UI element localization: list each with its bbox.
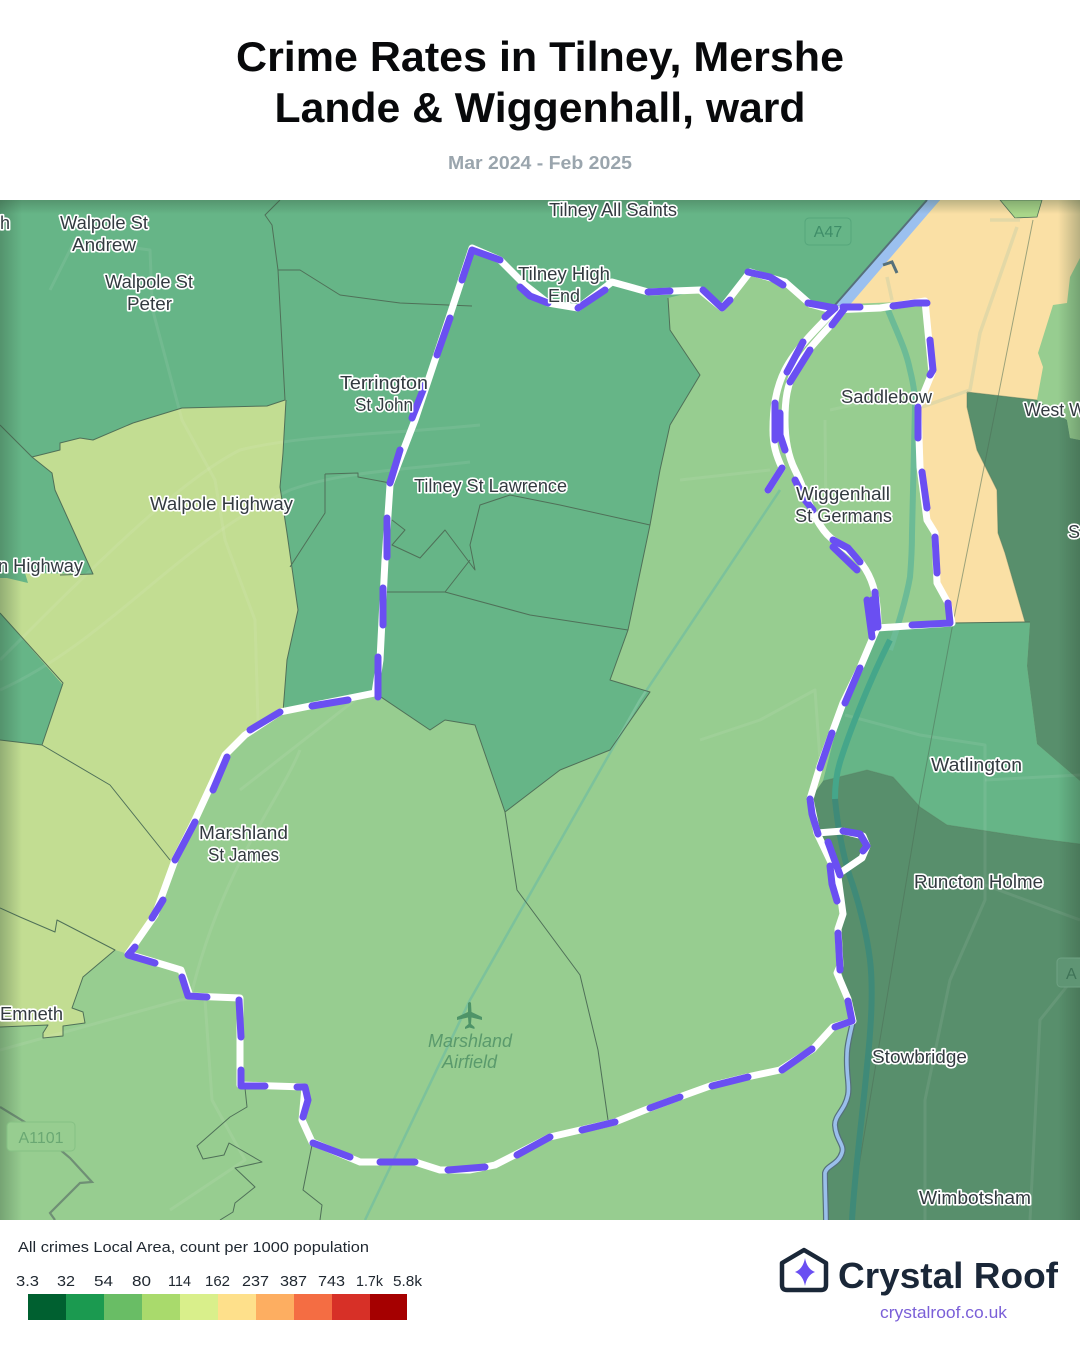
logo url: crystalroof.co.uk (880, 1304, 1008, 1322)
river Ouse lower fill (825, 1021, 853, 1222)
tan zone roads (887, 220, 1020, 407)
subtitle: date range: Mar 2024 - Feb 2025 (448, 153, 632, 173)
legend tick labels: 80 (132, 1273, 151, 1290)
zone: Saddlebow tan (848, 200, 1080, 623)
legend tick labels: 3.3 (16, 1273, 39, 1290)
label: h: h (0, 213, 10, 233)
label: Runcton Holme: Runcton Holme (914, 872, 1043, 892)
legend tick labels: 387 (280, 1273, 307, 1290)
drain channel mid (835, 640, 890, 799)
road network (0, 240, 1080, 1220)
legend tick labels: 237 (242, 1273, 269, 1290)
choropleth map panel (0, 200, 1080, 1222)
label: Watlington: Watlington (931, 755, 1022, 775)
ward boundary purple dashes (128, 250, 950, 1170)
edge vignette (0, 200, 1080, 1220)
road shield: A (1057, 958, 1080, 987)
river Ouse upper (835, 200, 940, 307)
legend (16, 1239, 423, 1320)
road shield: A47: A47 (814, 224, 842, 241)
legend tick labels (16, 1273, 423, 1290)
road shield: A: A (1066, 966, 1077, 983)
label: Wiggenhall St Germans (795, 484, 892, 526)
label: Wiggenhall St Germans: St Germans (795, 506, 892, 526)
label: S cropped: S (1068, 522, 1080, 542)
label: Tilney High End: End (548, 286, 580, 306)
label: Marshland St James: Marshland (199, 823, 288, 843)
road shield: A1101: A1101 (18, 1130, 64, 1147)
icon: airfield plane (457, 1002, 482, 1029)
road shield: A1101 (7, 1122, 75, 1151)
legend tick labels: 162 (205, 1273, 230, 1290)
legend title: All crimes Local Area, count per 1000 population (18, 1239, 369, 1256)
label: Tilney St Lawrence: Tilney St Lawrence (414, 476, 567, 496)
title: Lande & Wiggenhall, ward (274, 84, 806, 131)
place labels (0, 200, 1080, 1208)
label: Walpole St Andrew: Walpole St (60, 213, 148, 233)
label: Tilney All Saints: Tilney All Saints (549, 200, 677, 220)
logo: Crystal Roof (782, 1250, 1059, 1322)
label: Walpole Highway: Walpole Highway (150, 494, 293, 514)
label: Highway cropped: n Highway (0, 556, 83, 576)
road shield: A47 (805, 218, 851, 245)
label: Walpole St Andrew: Andrew (72, 235, 137, 255)
icon: house with star (782, 1250, 826, 1290)
zone: north and Tilney mid green (0, 200, 940, 812)
zone: far west pocket mid green (0, 613, 63, 745)
airfield runway line (365, 490, 780, 1220)
ward boundary white base (128, 248, 952, 1170)
label: Marshland Airfield: Marshland (428, 1031, 513, 1051)
label: Tilney High End (518, 264, 610, 306)
zone: east mid green (823, 622, 1080, 844)
zone: north east light green (1037, 400, 1080, 440)
zone: west pocket mid green (0, 425, 93, 583)
drain channel teal (888, 310, 915, 650)
label: Tilney High End: Tilney High (518, 264, 610, 284)
label: Walpole St Peter: Walpole St (105, 272, 193, 292)
label: Marshland Airfield (428, 1034, 512, 1068)
logo wordmark: Crystal Roof (838, 1255, 1059, 1296)
label: Marshland St James (199, 823, 288, 865)
thin parish boundaries (0, 200, 1080, 1220)
label: Terrington St John: Terrington (340, 373, 428, 393)
title: Crime Rates in Tilney, Mershe (236, 33, 844, 80)
title (236, 33, 844, 131)
label: Wimbotsham: Wimbotsham (919, 1188, 1031, 1208)
county boundary road A1101 side (0, 1107, 92, 1220)
zone: Walpole Highway lime (0, 400, 298, 1038)
legend tick labels: 5.8k (393, 1273, 423, 1290)
legend tick labels: 1.7k (356, 1273, 383, 1290)
legend tick labels: 32 (57, 1273, 75, 1290)
map base: light green zone (0, 200, 1080, 1220)
zone: south east dark green (810, 770, 1080, 1220)
label: Stowbridge: Stowbridge (872, 1047, 967, 1067)
label: Marshland Airfield: Airfield (441, 1052, 498, 1072)
label: Walpole St Peter: Peter (127, 294, 172, 314)
zone: east dark green (967, 392, 1080, 781)
label: Terrington St John (340, 373, 428, 415)
drain channel dark lower (835, 799, 872, 1220)
river Ouse lower (825, 1021, 853, 1222)
label: Wiggenhall St Germans: Wiggenhall (796, 484, 890, 504)
label: Emneth: Emneth (0, 1004, 63, 1024)
label: Terrington St John: St John (355, 395, 413, 415)
label: Saddlebow: Saddlebow (841, 387, 933, 407)
legend tick labels: 54 (94, 1273, 113, 1290)
legend colour scale (28, 1294, 407, 1320)
zone: small green patch at top right (1000, 200, 1042, 218)
legend tick labels: 114 (168, 1273, 191, 1290)
label: Marshland St James: St James (208, 845, 279, 865)
legend tick labels: 743 (318, 1273, 345, 1290)
label: Walpole St Peter (105, 272, 193, 314)
label: Walpole St Andrew (60, 213, 148, 255)
